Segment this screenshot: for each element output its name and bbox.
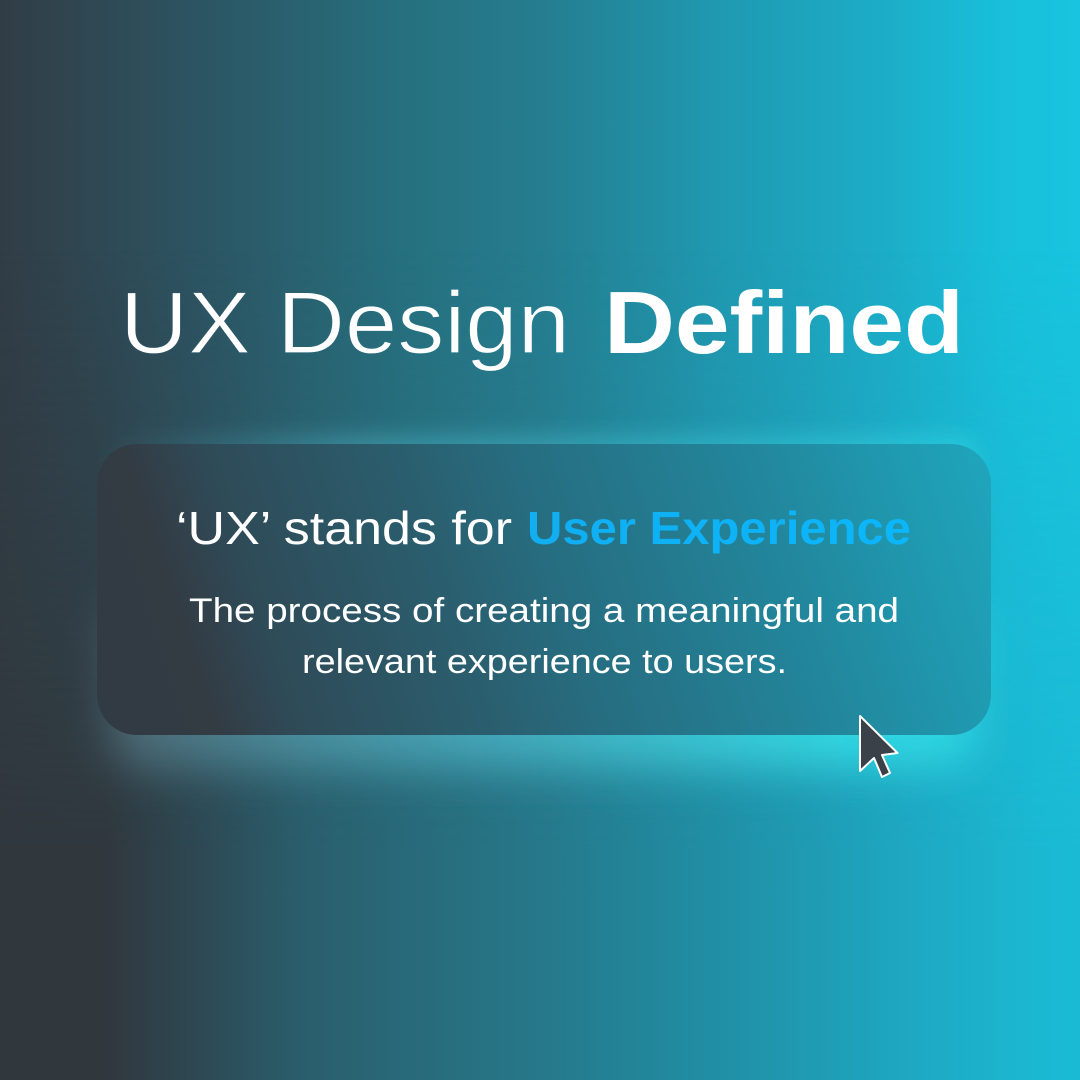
- card glow: [110, 436, 978, 768]
- title: [120, 273, 964, 372]
- title: UX Design: [120, 273, 570, 372]
- card heading: [176, 502, 911, 554]
- title: Defined: [604, 273, 964, 372]
- card heading: User Experience: [527, 502, 911, 554]
- panel: definition card: [97, 436, 991, 768]
- card description: relevant experience to users.: [302, 643, 787, 681]
- card body: [97, 444, 991, 735]
- icon: mouse cursor: [860, 716, 898, 777]
- card heading: ‘UX’ stands for: [176, 502, 512, 554]
- card description: The process of creating a meaningful and: [189, 592, 899, 630]
- card description: [189, 592, 899, 681]
